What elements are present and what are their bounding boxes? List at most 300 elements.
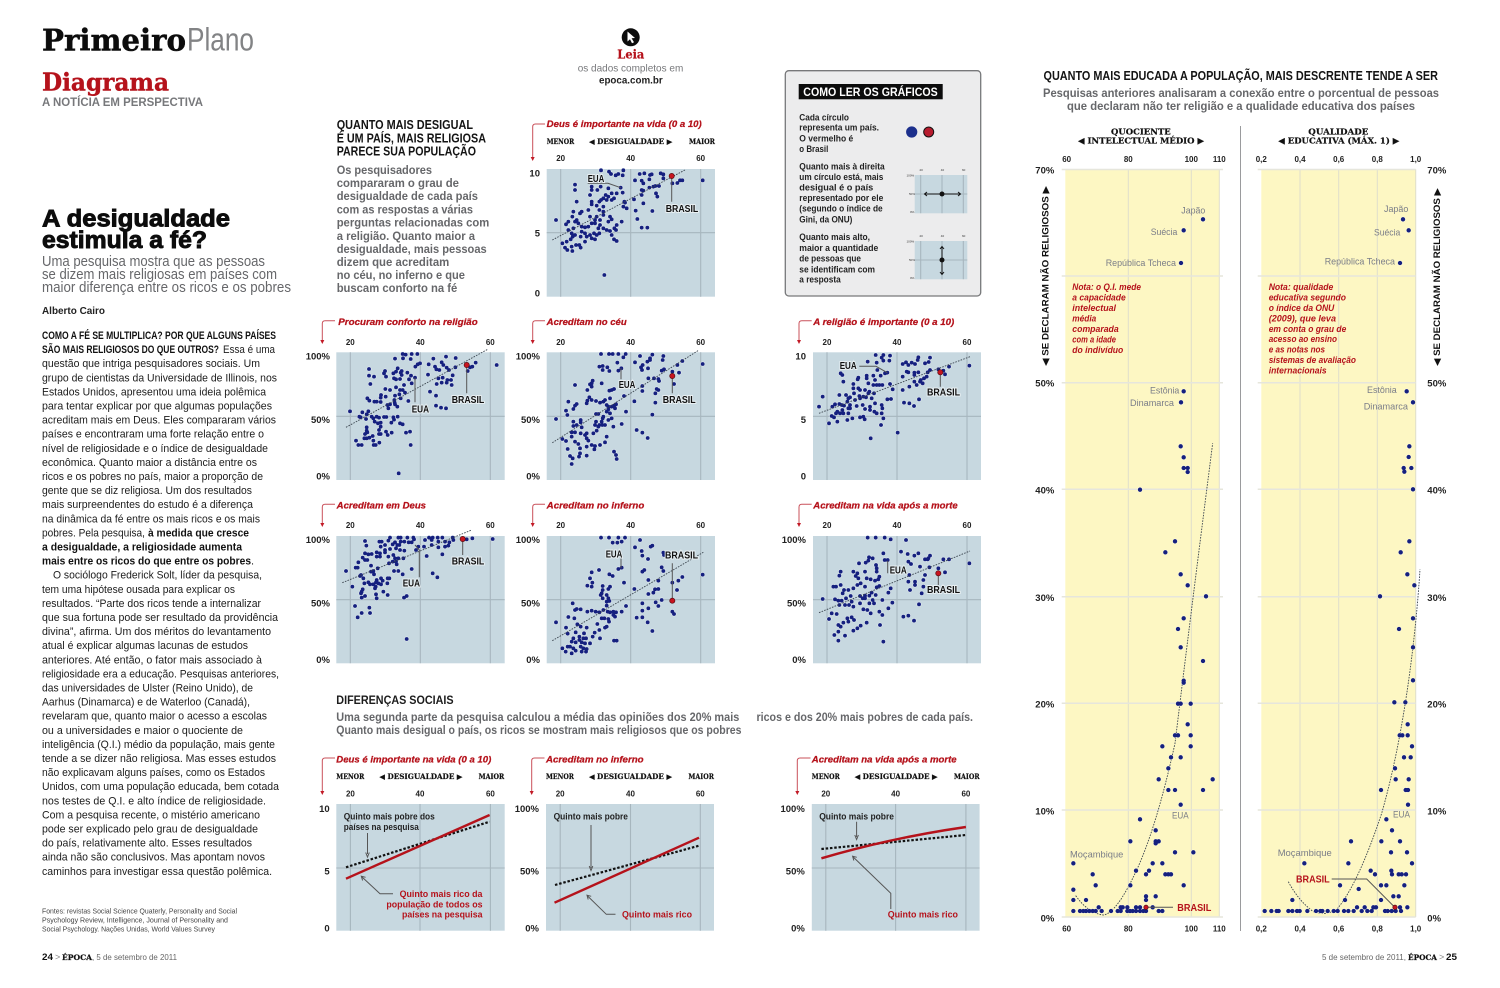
chart: Deus é importante na vida: 0 bbox=[535, 288, 540, 300]
line chart: Vida após a morte, ricos e pobres: 100% bbox=[780, 804, 805, 815]
chart: Procuram conforto na religião: BRASIL bbox=[452, 395, 484, 406]
chart: qualidade educativa: 0,6 bbox=[1333, 924, 1345, 934]
note: qualidade educativa: e as notas nos bbox=[1269, 345, 1325, 356]
line chart: Acreditam no inferno, ricos e pobres: Quinto mais rico bbox=[622, 910, 692, 920]
text block: quanto mais desigual: desigualdade, mais pessoas bbox=[337, 242, 487, 256]
chart: Deus é importante na vida: MAIOR bbox=[689, 137, 715, 146]
chart: Acreditam na vida após a morte: 20 bbox=[823, 521, 832, 530]
text block: diferenças sociais: ricos e dos 20% mais pobres de cada país. bbox=[756, 710, 973, 724]
explanation: vertical axis: a resposta bbox=[799, 275, 841, 286]
line chart: Deus é importante, ricos e pobres: países na pesquisa bbox=[402, 910, 483, 920]
masthead: Primeiro Plano: Plano bbox=[187, 22, 254, 58]
sources note: Social Psychology. Nações Unidas, World Values Survey bbox=[42, 924, 215, 934]
explanation: horizontal axis: representado por ele bbox=[799, 193, 883, 204]
article body text: à medida que cresce bbox=[148, 527, 249, 539]
chart: quociente intelectual médio: 80 bbox=[1124, 155, 1133, 164]
chart: quociente intelectual médio: 80 bbox=[1124, 924, 1133, 934]
line chart: Acreditam no inferno, ricos e pobres: MAIOR bbox=[688, 772, 714, 781]
explanation: vertical axis: de pessoas que bbox=[799, 254, 861, 265]
line chart: Vida após a morte, ricos e pobres: 60 bbox=[961, 790, 971, 799]
article body text: Unidos, com uma população educada, bem cotada bbox=[42, 781, 280, 793]
explanation: horizontal axis: Quanto mais à direita bbox=[799, 161, 885, 172]
footer left: page 24: > bbox=[55, 952, 60, 962]
explanation: vertical axis: 20 bbox=[920, 234, 923, 238]
article body text: caminhos para investigar essa questão polêmica. bbox=[42, 866, 272, 878]
chart: qualidade educativa: 0% bbox=[1427, 914, 1442, 924]
line chart: Deus é importante, ricos e pobres: Quinto mais pobre dos bbox=[344, 812, 435, 822]
chart: qualidade educativa: BRASIL bbox=[1296, 875, 1330, 886]
chart: A religião é importante: A religião é importante (0 a 10) bbox=[812, 317, 954, 328]
article body text: acreditam mais em Deus. Eles compararam vários bbox=[42, 415, 276, 427]
text block: quanto mais desigual: com as respostas a várias bbox=[337, 202, 473, 216]
masthead: Primeiro Plano bbox=[42, 22, 254, 58]
line chart: Acreditam no inferno, ricos e pobres: Acreditam no inferno bbox=[545, 754, 644, 766]
line chart: Acreditam no inferno, ricos e pobres bbox=[515, 754, 714, 934]
line chart: Deus é importante, ricos e pobres: MENOR bbox=[336, 772, 364, 781]
chart: quociente intelectual médio: 30% bbox=[1035, 593, 1055, 604]
article body text: SÃO MAIS RELIGIOSOS DO QUE OUTROS? bbox=[42, 343, 219, 356]
article body text: revelaram que, quanto maior o acesso a escolas bbox=[42, 711, 267, 723]
chart: A religião é importante bbox=[795, 317, 981, 482]
text block: quanto mais desigual: no céu, no inferno e que bbox=[337, 268, 465, 282]
line chart: Acreditam no inferno, ricos e pobres: 20 bbox=[556, 790, 565, 799]
text block: quanto mais desigual: QUANTO MAIS DESIGUAL bbox=[337, 118, 473, 132]
text block: diferenças sociais: DIFERENÇAS SOCIAIS bbox=[336, 693, 454, 707]
article body text: para tentar explicar por que algumas populações bbox=[42, 400, 272, 412]
chart: A religião é importante: 40 bbox=[893, 338, 902, 347]
text block: quanto mais desigual: Os pesquisadores bbox=[337, 163, 432, 177]
explanation: circles: Cada círculo bbox=[799, 112, 849, 123]
chart: quociente intelectual médio: ◀ INTELECTUAL MÉDIO ▶ bbox=[1078, 134, 1204, 146]
line chart: Deus é importante, ricos e pobres: 20 bbox=[346, 790, 355, 799]
chart: A religião é importante: 60 bbox=[963, 338, 972, 347]
article body text: nos testes de Q.I. e alto índice de religiosidade. bbox=[42, 795, 266, 807]
chart: Procuram conforto na religião: 20 bbox=[346, 338, 355, 347]
article headline: A desigualdade bbox=[42, 206, 230, 232]
chart: Acreditam no céu: BRASIL bbox=[663, 395, 696, 406]
chart: A religião é importante: 20 bbox=[823, 338, 832, 347]
callout: read data online: Leia bbox=[617, 46, 644, 62]
chart: quociente intelectual médio: QUOCIENTE bbox=[1111, 128, 1171, 138]
explanation: horizontal axis: 20 bbox=[920, 168, 923, 172]
explanation: vertical axis: 100% bbox=[906, 240, 915, 244]
article headline: estimula a fé? bbox=[42, 227, 207, 254]
article body text: econômica. Quanto maior a distância entre os bbox=[42, 457, 257, 469]
chart: Acreditam em Deus: 20 bbox=[346, 521, 355, 530]
chart: quociente intelectual médio: 20% bbox=[1035, 700, 1055, 710]
article headline bbox=[42, 206, 230, 254]
chart: qualidade educativa: Dinamarca bbox=[1364, 402, 1409, 413]
article body text: inteligência (Q.I.) médio da população, mais gente bbox=[42, 739, 275, 751]
note: qualidade educativa: o índice da ONU bbox=[1269, 303, 1335, 314]
callout: read data online: os dados completos em bbox=[578, 62, 684, 74]
chart: A religião é importante: 0 bbox=[801, 472, 806, 482]
line chart: Deus é importante, ricos e pobres: países na pesquisa bbox=[344, 822, 419, 833]
line chart: Vida após a morte, ricos e pobres: Quinto mais pobre bbox=[819, 812, 894, 822]
text block: quanto mais desigual: a religião. Quanto maior a bbox=[337, 229, 475, 243]
footer right: page 25: > bbox=[1439, 952, 1444, 962]
byline: Alberto Cairo bbox=[42, 305, 105, 317]
text block: quanto mais desigual: desigualdade de cada país bbox=[337, 189, 478, 203]
explanation: horizontal axis: 60 bbox=[962, 168, 966, 172]
line chart: Acreditam no inferno, ricos e pobres: ◀ DESIGUALDADE ▶ bbox=[589, 772, 673, 781]
chart: qualidade educativa: Japão bbox=[1384, 204, 1408, 215]
chart: qualidade educativa: 1,0 bbox=[1410, 924, 1422, 934]
article body text: Estados Unidos, apresentou uma ideia polêmica bbox=[42, 386, 267, 398]
chart: qualidade educativa bbox=[1256, 128, 1447, 934]
line chart: Deus é importante, ricos e pobres: 10 bbox=[319, 804, 330, 815]
explanation: vertical axis: maior a quantidade bbox=[799, 243, 878, 254]
note: qualidade educativa: (2009), que leva bbox=[1269, 313, 1336, 324]
heading: quanto mais educada: que declaram não ter religião e a qualidade educativa dos países bbox=[1067, 99, 1415, 113]
chart: Procuram conforto na religião: 0% bbox=[316, 472, 331, 482]
chart: A religião é importante: BRASIL bbox=[927, 388, 960, 399]
chart: Acreditam em Deus: 60 bbox=[486, 521, 495, 530]
chart: Deus é importante na vida: Deus é importante na vida (0 a 10) bbox=[547, 119, 702, 130]
line chart: Deus é importante, ricos e pobres: MAIOR bbox=[479, 772, 504, 781]
article body text: O sociólogo Frederick Solt, líder da pesquisa, bbox=[53, 570, 262, 582]
chart: Acreditam na vida após a morte: 0% bbox=[792, 655, 807, 666]
chart: qualidade educativa: 0,6 bbox=[1333, 155, 1345, 164]
chart: qualidade educativa: 0,4 bbox=[1294, 924, 1306, 934]
chart: A religião é importante: EUA bbox=[840, 361, 857, 372]
note: qualidade educativa: internacionais bbox=[1269, 366, 1327, 377]
chart: quociente intelectual médio bbox=[1035, 128, 1226, 934]
text block: quanto mais desigual bbox=[337, 118, 489, 295]
chart: Acreditam no inferno: EUA bbox=[606, 549, 622, 560]
section heading: Diagrama bbox=[42, 68, 203, 109]
explanation: vertical axis: 50% bbox=[909, 258, 915, 262]
line chart: Vida após a morte, ricos e pobres: MAIOR bbox=[954, 772, 980, 781]
chart: qualidade educativa: ◀ EDUCATIVA (MÁX. 1) ▶ bbox=[1278, 134, 1400, 146]
article body text: a desigualdade, a religiosidade aumenta bbox=[42, 542, 243, 554]
chart: A religião é importante: 5 bbox=[801, 415, 807, 426]
chart: qualidade educativa: 0,4 bbox=[1294, 155, 1306, 164]
panel: como ler os gráficos: COMO LER OS GRÁFICOS bbox=[803, 84, 938, 99]
article body text: nível de religiosidade e o índice de desigualdade bbox=[42, 443, 268, 455]
chart: Acreditam na vida após a morte: 40 bbox=[893, 521, 902, 530]
text block: diferenças sociais bbox=[336, 693, 973, 737]
chart: quociente intelectual médio: 110 bbox=[1213, 155, 1226, 164]
line chart: Vida após a morte, ricos e pobres: Acreditam na vida após a morte bbox=[811, 754, 957, 766]
chart: quociente intelectual médio: Dinamarca bbox=[1130, 398, 1175, 409]
chart: Deus é importante na vida: 10 bbox=[529, 168, 540, 180]
line chart: Deus é importante, ricos e pobres: Deus é importante na vida (0 a 10) bbox=[336, 754, 491, 766]
line chart: Deus é importante, ricos e pobres: 60 bbox=[486, 790, 495, 799]
explanation: circles: o Brasil bbox=[799, 144, 828, 155]
article body text: ricos e os pobres no país, maior a proporção de bbox=[42, 471, 263, 483]
chart: Acreditam no inferno bbox=[516, 501, 715, 666]
explanation: horizontal axis: 100% bbox=[906, 174, 915, 178]
heading: quanto mais educada: Pesquisas anteriores analisaram a conexão entre o porcentual de pessoas bbox=[1043, 86, 1439, 100]
chart: Acreditam em Deus: 100% bbox=[306, 535, 331, 546]
explanation: vertical axis: 40 bbox=[941, 234, 944, 238]
chart: quociente intelectual médio: 50% bbox=[1035, 378, 1055, 390]
chart: Acreditam no inferno: 60 bbox=[696, 521, 706, 530]
chart: Acreditam no céu: 60 bbox=[696, 338, 706, 347]
footer left: page 24: , 5 de setembro de 2011 bbox=[92, 953, 178, 962]
chart: Procuram conforto na religião: EUA bbox=[412, 404, 429, 416]
line chart: Deus é importante, ricos e pobres: Quinto mais rico da bbox=[400, 889, 483, 900]
heading: quanto mais educada: QUANTO MAIS EDUCADA A POPULAÇÃO, MAIS DESCRENTE TENDE A SER bbox=[1044, 68, 1438, 83]
explanation: horizontal axis: (segundo o índice de bbox=[799, 204, 883, 215]
chart: Deus é importante na vida: 20 bbox=[556, 154, 566, 163]
chart: qualidade educativa: República Tcheca bbox=[1325, 257, 1396, 268]
chart: Acreditam no inferno: 40 bbox=[626, 521, 636, 530]
note: qualidade educativa bbox=[1269, 282, 1356, 377]
article body text: ou a universidades e maior o quociente de bbox=[42, 725, 243, 737]
chart: Acreditam no céu: 20 bbox=[556, 338, 566, 347]
note: qualidade educativa: em conta o grau de bbox=[1269, 324, 1347, 335]
text block: diferenças sociais: Uma segunda parte da pesquisa calculou a média das opiniões dos 20% mais bbox=[336, 710, 740, 724]
explanation: horizontal axis: 50% bbox=[909, 192, 915, 196]
chart: Deus é importante na vida: BRASIL bbox=[666, 204, 698, 215]
chart: qualidade educativa: 0,2 bbox=[1256, 924, 1267, 934]
footer right: page 25: ÉPOCA bbox=[1408, 953, 1438, 962]
panel: como ler os gráficos bbox=[785, 71, 981, 296]
chart: A religião é importante: 10 bbox=[795, 352, 806, 362]
line chart: Deus é importante, ricos e pobres: 40 bbox=[416, 790, 425, 799]
chart: Procuram conforto na religião bbox=[306, 317, 505, 482]
chart: quociente intelectual médio: EUA bbox=[1172, 810, 1189, 822]
article subheading: maior diferença entre os ricos e os pobres bbox=[42, 279, 291, 296]
chart: Procuram conforto na religião: 50% bbox=[311, 415, 331, 426]
article body text: atual é explicar algumas lacunas de estudos bbox=[42, 640, 248, 652]
chart: quociente intelectual médio: 110 bbox=[1213, 924, 1226, 934]
chart: quociente intelectual médio: Moçambique bbox=[1070, 850, 1123, 860]
article body text: gente que se diz religiosa. Um dos resultados bbox=[42, 485, 252, 497]
note: Q.I.: do indivíduo bbox=[1072, 345, 1123, 356]
chart: qualidade educativa: 70% bbox=[1427, 166, 1447, 176]
chart: quociente intelectual médio: República Tcheca bbox=[1106, 258, 1177, 269]
article body text: divina”, afirma. Um dos méritos do levantamento bbox=[42, 626, 271, 638]
explanation: horizontal axis: desigual é o país bbox=[799, 183, 873, 194]
sources note bbox=[42, 906, 237, 934]
line chart: Acreditam no inferno, ricos e pobres: 0% bbox=[525, 924, 540, 934]
chart: quociente intelectual médio: 0% bbox=[1041, 914, 1055, 924]
chart: Acreditam em Deus: Acreditam em Deus bbox=[336, 501, 426, 512]
explanation: vertical axis bbox=[799, 232, 967, 286]
chart: Deus é importante na vida: MENOR bbox=[547, 137, 574, 146]
explanation: circles: representa um país. bbox=[799, 123, 879, 134]
explanation: vertical axis: 60 bbox=[962, 234, 966, 238]
chart: quociente intelectual médio: 100 bbox=[1185, 924, 1199, 934]
chart: qualidade educativa: 0,2 bbox=[1256, 155, 1267, 164]
chart: Procuram conforto na religião: Procuram conforto na religião bbox=[338, 317, 478, 328]
chart: qualidade educativa: Suécia bbox=[1374, 227, 1401, 238]
article body text: que sua fortuna pode ser resultado da providência bbox=[42, 612, 279, 624]
masthead: Primeiro Plano: Primeiro bbox=[42, 24, 186, 58]
line chart: Vida após a morte, ricos e pobres: 20 bbox=[821, 790, 831, 799]
note: Q.I.: a capacidade bbox=[1072, 292, 1126, 304]
line chart: Deus é importante, ricos e pobres bbox=[319, 754, 505, 934]
article body text: questão que intriga pesquisadores sociais. Um bbox=[42, 358, 260, 370]
callout: read data online: epoca.com.br bbox=[599, 74, 663, 86]
article body text: mais entre os ricos do que entre os pobres bbox=[42, 556, 251, 568]
note: Q.I.: intelectual bbox=[1072, 303, 1116, 314]
sources note: Psychology Review, Intelligence, Journal of Personality and bbox=[42, 916, 228, 924]
note: qualidade educativa: sistemas de avaliação bbox=[1269, 355, 1356, 366]
chart: quociente intelectual médio: Estônia bbox=[1150, 386, 1180, 396]
chart: Acreditam no céu: 40 bbox=[626, 338, 636, 347]
chart: qualidade educativa: EUA bbox=[1393, 809, 1411, 820]
text block: diferenças sociais: Quanto mais desigual o país, os ricos se mostram mais religiosos que os pobres bbox=[336, 723, 742, 737]
article body text: países e encontraram uma forte relação entre o bbox=[42, 429, 264, 441]
article body text: na dinâmica da fé entre os mais ricos e os mais bbox=[42, 513, 260, 525]
chart: Acreditam no céu: Acreditam no céu bbox=[546, 317, 627, 328]
chart: Acreditam em Deus bbox=[306, 501, 505, 666]
chart: qualidade educativa: Moçambique bbox=[1278, 848, 1332, 859]
chart: quociente intelectual médio: Suécia bbox=[1151, 227, 1178, 238]
chart: Deus é importante na vida: EUA bbox=[588, 174, 604, 185]
chart: Acreditam na vida após a morte: 100% bbox=[782, 535, 807, 546]
chart: quociente intelectual médio: ◀ SE DECLARAM NÃO RELIGIOSOS ▶ bbox=[1040, 185, 1051, 366]
note: qualidade educativa: acesso ao ensino bbox=[1269, 334, 1337, 345]
text block: quanto mais desigual: PARECE SUA POPULAÇÃO bbox=[337, 143, 476, 158]
line chart: Vida após a morte, ricos e pobres: ◀ DESIGUALDADE ▶ bbox=[855, 772, 938, 781]
note: qualidade educativa: Nota: qualidade bbox=[1269, 282, 1334, 293]
line chart: Acreditam no inferno, ricos e pobres: MENOR bbox=[546, 772, 574, 781]
note: Q.I.: comparada bbox=[1072, 324, 1119, 335]
chart: Acreditam em Deus: 40 bbox=[416, 521, 425, 530]
chart: Acreditam no inferno: 50% bbox=[521, 598, 541, 610]
chart: Deus é importante na vida: 60 bbox=[696, 154, 706, 163]
chart: quociente intelectual médio: 10% bbox=[1035, 806, 1055, 818]
article body text: anteriores. Até então, o fator mais associado à bbox=[42, 654, 263, 666]
section heading: Diagrama: Diagrama bbox=[42, 68, 169, 96]
chart: Acreditam na vida após a morte: 60 bbox=[963, 521, 972, 530]
article body text: Aarhus (Dinamarca) e de Waterloo (Canadá), bbox=[42, 697, 250, 709]
section heading: Diagrama: A NOTÍCIA EM PERSPECTIVA bbox=[42, 94, 203, 109]
article body text: mais surpreendentes do estudo é a diferença bbox=[42, 499, 254, 511]
explanation: horizontal axis: Gini, da ONU) bbox=[799, 214, 852, 225]
chart: Deus é importante na vida: 5 bbox=[535, 228, 541, 240]
chart: Acreditam no céu: 100% bbox=[516, 352, 541, 362]
explanation: circles: O vermelho é bbox=[799, 134, 853, 145]
article subheading bbox=[42, 253, 291, 296]
chart: Acreditam na vida após a morte: Acreditam na vida após a morte bbox=[812, 501, 958, 512]
chart: Acreditam no inferno: BRASIL bbox=[665, 550, 698, 561]
article body text: ainda não são conclusivos. Mas apontam novos bbox=[42, 852, 265, 864]
chart: Acreditam na vida após a morte: 50% bbox=[787, 598, 807, 610]
chart: Acreditam em Deus: 50% bbox=[311, 598, 331, 610]
article body text: Com a pesquisa recente, o mistério americano bbox=[42, 809, 260, 821]
chart: Acreditam no inferno: Acreditam no inferno bbox=[546, 501, 644, 512]
article body text: resultados. “Parte dos ricos tende a internalizar bbox=[42, 598, 261, 610]
note: Q.I.: Nota: o Q.I. mede bbox=[1072, 282, 1142, 293]
footer left: page 24 bbox=[42, 952, 178, 963]
chart: qualidade educativa: 40% bbox=[1427, 486, 1447, 496]
chart: Acreditam no inferno: 20 bbox=[556, 521, 566, 530]
chart: qualidade educativa: 0,8 bbox=[1372, 155, 1383, 164]
chart: Acreditam na vida após a morte: BRASIL bbox=[927, 585, 960, 596]
chart: Deus é importante na vida: 40 bbox=[626, 154, 636, 163]
explanation: vertical axis: 0% bbox=[910, 276, 915, 280]
chart: qualidade educativa: 0,8 bbox=[1372, 924, 1383, 934]
chart: Acreditam na vida após a morte: EUA bbox=[890, 565, 907, 576]
article body text: não explicavam alguns países, como os Estados bbox=[42, 767, 265, 779]
chart: qualidade educativa: 20% bbox=[1427, 700, 1447, 710]
text block: quanto mais desigual: perguntas relacionadas com bbox=[337, 216, 489, 230]
line chart: Deus é importante, ricos e pobres: ◀ DESIGUALDADE ▶ bbox=[379, 772, 463, 781]
chart: Acreditam na vida após a morte bbox=[782, 501, 981, 666]
chart: Acreditam no céu: 0% bbox=[526, 472, 541, 482]
chart: Acreditam no inferno: 0% bbox=[526, 655, 541, 666]
article body text: grupo de cientistas da Universidade de Illinois, nos bbox=[42, 372, 277, 384]
article body text: tende a se dizer não religiosa. Mas esses estudos bbox=[42, 753, 276, 765]
sources note: Fontes: revistas Social Science Quaterly, Personality and Social bbox=[42, 906, 237, 916]
article body text: religiosidade era a educação. Pesquisas anteriores, bbox=[42, 668, 279, 680]
chart: qualidade educativa: Estônia bbox=[1367, 385, 1397, 396]
footer right: page 25: 5 de setembro de 2011, bbox=[1322, 953, 1406, 962]
text block: quanto mais desigual: É UM PAÍS, MAIS RELIGIOSA bbox=[337, 130, 486, 145]
chart: quociente intelectual médio: 70% bbox=[1035, 166, 1055, 176]
chart: Acreditam no céu: 50% bbox=[521, 415, 541, 426]
chart: quociente intelectual médio: 40% bbox=[1035, 486, 1055, 496]
chart: Acreditam no inferno: 100% bbox=[516, 535, 541, 546]
chart: qualidade educativa: ◀ SE DECLARAM NÃO RELIGIOSOS ▶ bbox=[1432, 187, 1443, 366]
chart: Acreditam em Deus: BRASIL bbox=[452, 557, 484, 568]
chart: Deus é importante na vida: ◀ DESIGUALDADE ▶ bbox=[589, 137, 673, 146]
article body text bbox=[42, 329, 280, 878]
chart: qualidade educativa: 10% bbox=[1427, 806, 1447, 818]
explanation: vertical axis: Quanto mais alto, bbox=[799, 232, 870, 243]
chart: quociente intelectual médio: Japão bbox=[1181, 206, 1205, 216]
line chart: Acreditam no inferno, ricos e pobres: Quinto mais pobre bbox=[554, 812, 628, 822]
chart: Procuram conforto na religião: 40 bbox=[416, 338, 425, 347]
note: Q.I.: com a idade bbox=[1072, 335, 1117, 346]
line chart: Acreditam no inferno, ricos e pobres: 100% bbox=[515, 804, 540, 815]
note: Q.I. bbox=[1072, 282, 1142, 356]
line chart: Vida após a morte, ricos e pobres: 0% bbox=[791, 924, 805, 934]
footer right: page 25 bbox=[1322, 952, 1458, 963]
chart: qualidade educativa: 50% bbox=[1427, 378, 1447, 390]
article body text: COMO A FÉ SE MULTIPLICA? POR QUE ALGUNS PAÍSES bbox=[42, 329, 276, 342]
chart: Deus é importante na vida bbox=[529, 119, 715, 300]
explanation: horizontal axis: um círculo está, mais bbox=[799, 172, 883, 183]
article body text: pobres. Pela pesquisa, bbox=[42, 527, 145, 539]
line chart: Deus é importante, ricos e pobres: 5 bbox=[324, 866, 330, 878]
chart: quociente intelectual médio: 100 bbox=[1185, 155, 1199, 164]
article body text: tem uma hipótese ousada para explicar os bbox=[42, 584, 235, 596]
explanation: horizontal axis bbox=[799, 161, 967, 225]
line chart: Acreditam no inferno, ricos e pobres: 60 bbox=[696, 790, 705, 799]
text block: quanto mais desigual: compararam o grau de bbox=[337, 176, 459, 190]
chart: qualidade educativa: 1,0 bbox=[1410, 155, 1422, 164]
chart: Acreditam em Deus: EUA bbox=[403, 578, 420, 589]
line chart: Vida após a morte, ricos e pobres: 40 bbox=[891, 790, 901, 799]
chart: quociente intelectual médio: BRASIL bbox=[1177, 903, 1211, 914]
article body text: pode ser explicado pelo grau de desigualdade bbox=[42, 824, 258, 836]
line chart: Vida após a morte, ricos e pobres bbox=[780, 754, 980, 934]
line chart: Deus é importante, ricos e pobres: população de todos os bbox=[386, 900, 482, 910]
article subheading: Uma pesquisa mostra que as pessoas bbox=[42, 253, 265, 270]
line chart: Vida após a morte, ricos e pobres: MENOR bbox=[812, 772, 840, 781]
text block: quanto mais desigual: dizem que acreditam bbox=[337, 255, 449, 269]
text block: quanto mais desigual: buscam conforto na fé bbox=[337, 281, 458, 295]
footer right: page 25: 25 bbox=[1446, 952, 1458, 963]
chart: Procuram conforto na religião: 60 bbox=[486, 338, 495, 347]
explanation: vertical axis: se identificam com bbox=[799, 264, 875, 275]
chart: quociente intelectual médio: 60 bbox=[1062, 924, 1072, 934]
explanation: circles bbox=[799, 112, 934, 155]
article body text: do país, relativamente alto. Esses resultados bbox=[42, 838, 252, 850]
chart: Acreditam em Deus: 0% bbox=[316, 655, 331, 666]
chart: Acreditam no céu bbox=[516, 317, 715, 482]
article body text: Essa é uma bbox=[223, 344, 276, 356]
article body text: . bbox=[251, 556, 254, 568]
footer left: page 24: 24 bbox=[42, 952, 54, 963]
